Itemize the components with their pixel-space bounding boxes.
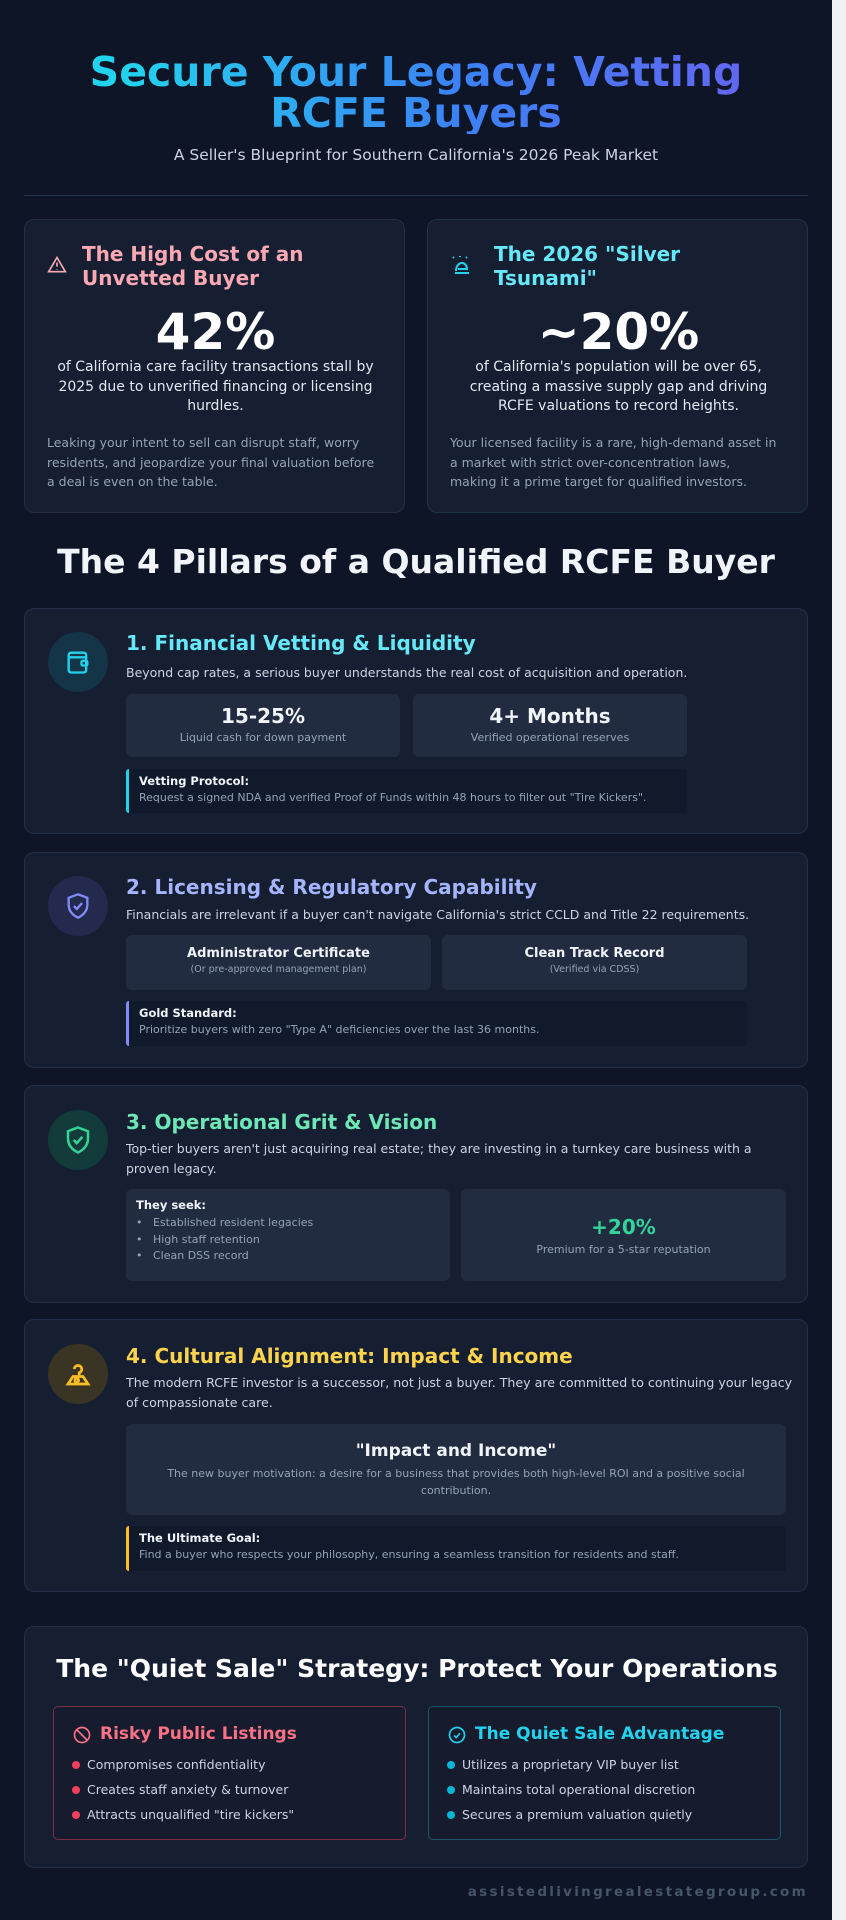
callout: vetting protocol (126, 769, 687, 813)
icon: ban (74, 1726, 90, 1744)
callout: gold standard (126, 1001, 747, 1046)
box: quiet advantage: Maintains total operational discretion (462, 1782, 695, 1797)
title: 3. Operational Grit & Vision (126, 1110, 437, 1134)
box: risky listings: Attracts unqualified "tire kickers" (87, 1807, 294, 1822)
callout: gold standard: Prioritize buyers with zero "Type A" deficiencies over the last 36 months. (139, 1023, 539, 1036)
icon: wave (452, 256, 469, 274)
callout: ultimate goal (126, 1526, 786, 1571)
box: risky listings: Risky Public Listings (100, 1724, 297, 1744)
stat: reserves: 4+ Months (489, 704, 611, 728)
panel: high cost (24, 219, 405, 513)
box: impact and income (126, 1424, 786, 1515)
title: 4. Cultural Alignment: Impact & Income (126, 1344, 573, 1368)
box: they seek: • Established resident legacies (136, 1216, 313, 1229)
icon: check circle (448, 1726, 466, 1744)
stat: 42% (156, 303, 275, 361)
stat: reserves: Verified operational reserves (471, 731, 629, 744)
box: track record: Clean Track Record (524, 946, 665, 961)
heading: The 2026 "Silver (494, 242, 680, 266)
description: of California's population will be over 65, creating a massive supply gap and driving RCFE valuations to record heights. (470, 359, 767, 414)
note: Leaking your intent to sell can disrupt staff, worry residents, and jeopardize your final valuation before a deal is even on the table. (47, 435, 374, 489)
box: quiet advantage: Secures a premium valuation quietly (462, 1807, 692, 1822)
heading: Tsunami" (494, 266, 597, 290)
box: they seek: • High staff retention (136, 1232, 260, 1246)
box: impact and income: "Impact and Income" (356, 1441, 556, 1461)
box: administrator (126, 935, 431, 990)
heading: The High Cost of an (82, 242, 304, 266)
heading: Unvetted Buyer (82, 266, 259, 290)
stat: premium (461, 1189, 786, 1281)
callout: gold standard: Gold Standard: (139, 1006, 237, 1020)
icon: wallet (48, 632, 108, 692)
stat: down payment (126, 694, 400, 757)
title: 1. Financial Vetting & Liquidity (126, 631, 476, 655)
title: Secure Your Legacy: Vetting (90, 48, 742, 96)
title: RCFE Buyers (270, 89, 562, 137)
description: Beyond cap rates, a serious buyer understands the real cost of acquisition and operation. (126, 665, 687, 680)
panel: silver tsunami (427, 219, 808, 513)
box: risky listings: Compromises confidentiality (87, 1757, 265, 1772)
callout: vetting protocol: Request a signed NDA and verified Proof of Funds within 48 hours to filter out "Tire Kickers". (139, 791, 647, 804)
panel: quiet sale (24, 1626, 808, 1868)
stat: down payment: Liquid cash for down payment (180, 731, 346, 744)
box: quiet advantage: The Quiet Sale Advantage (475, 1724, 724, 1744)
callout: ultimate goal: Find a buyer who respects your philosophy, ensuring a seamless transition for residents and staff. (139, 1548, 679, 1561)
box: administrator: Administrator Certificate (187, 946, 370, 961)
box: risky listings (53, 1706, 406, 1840)
box: quiet advantage: Utilizes a proprietary VIP buyer list (462, 1757, 679, 1772)
box: they seek: They seek: (136, 1198, 206, 1212)
box: administrator: (Or pre-approved management plan) (191, 964, 366, 975)
box: track record: (Verified via CDSS) (550, 964, 639, 975)
heading: The "Quiet Sale" Strategy: Protect Your Operations (56, 1654, 778, 1683)
title: 2. Licensing & Regulatory Capability (126, 875, 537, 899)
heading (82, 242, 304, 290)
stat: down payment: 15-25% (221, 704, 305, 728)
panel: pillar 1 (24, 608, 808, 834)
stat: premium: +20% (591, 1215, 656, 1239)
callout: vetting protocol: Vetting Protocol: (139, 774, 249, 788)
description: Financials are irrelevant if a buyer can't navigate California's strict CCLD and Title 22 requirements. (126, 907, 749, 922)
description: Top-tier buyers aren't just acquiring real estate; they are investing in a turnkey care business with a proven legacy. (126, 1141, 752, 1176)
heading (494, 242, 680, 290)
title (0, 52, 832, 134)
footer: assistedlivingrealestategroup.com (468, 1884, 808, 1900)
stat: ~20% (538, 303, 699, 361)
box: quiet advantage (428, 1706, 781, 1840)
box: risky listings: Creates staff anxiety & turnover (87, 1782, 288, 1797)
callout: ultimate goal: The Ultimate Goal: (139, 1531, 260, 1545)
heading: 4 pillars: The 4 Pillars of a Qualified RCFE Buyer (57, 542, 775, 581)
icon: warning (47, 256, 67, 272)
panel: pillar 3 (24, 1085, 808, 1303)
panel: pillar 2 (24, 852, 808, 1068)
description: The modern RCFE investor is a successor, not just a buyer. They are committed to continuing your legacy of compassionate care. (126, 1375, 792, 1410)
stat: premium: Premium for a 5-star reputation (536, 1243, 711, 1256)
box: impact and income: The new buyer motivation: a desire for a business that provides both high-level ROI and a positive social contribution. (167, 1467, 745, 1497)
icon: handshake (48, 1344, 108, 1404)
box: they seek: • Clean DSS record (136, 1249, 249, 1262)
subtitle: A Seller's Blueprint for Southern California's 2026 Peak Market (174, 146, 658, 164)
icon: shield (48, 876, 108, 936)
box: they seek (126, 1189, 450, 1281)
stat: reserves (413, 694, 687, 757)
icon: shield check (48, 1110, 108, 1170)
note: Your licensed facility is a rare, high-demand asset in a market with strict over-concentration laws, making it a prime target for qualified investors. (450, 435, 776, 489)
description: of California care facility transactions stall by 2025 due to unverified financing or licensing hurdles. (57, 359, 374, 414)
box: track record (442, 935, 747, 990)
panel: pillar 4 (24, 1319, 808, 1592)
